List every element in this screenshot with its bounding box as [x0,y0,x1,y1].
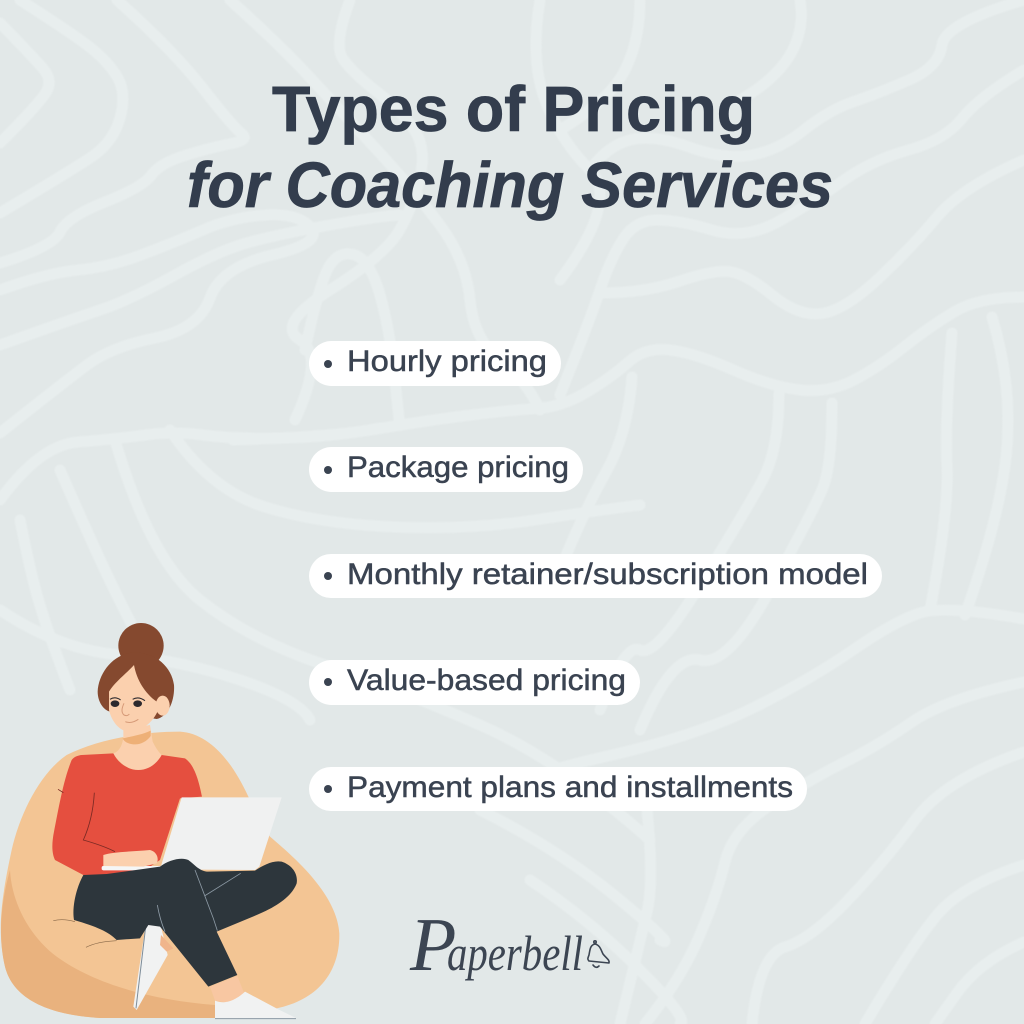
sweater [52,753,202,876]
list item: package pricing: Package pricing [347,451,569,484]
face [109,665,159,732]
neck shadow [123,731,151,744]
list item: value-based pricing: Value-based pricing [347,664,626,697]
icon: bell [588,941,609,967]
list item: monthly retainer: Monthly retainer/subscription model [347,558,868,591]
title line 2: for Coaching Services [187,149,833,221]
title line 1: Types of Pricing [272,73,755,145]
list item: payment plans: Payment plans and installments [347,771,793,804]
logo: Paperbell [409,903,609,987]
illustration: woman on beanbag with laptop [1,623,339,1019]
list item: hourly pricing: Hourly pricing [347,345,547,378]
beanbag [1,732,339,1018]
near shoe [215,992,296,1019]
legs [73,859,297,987]
list item: hourly pricing [309,341,561,386]
title [187,73,833,221]
bun and hair back [98,623,174,719]
list item: value-based pricing [309,660,640,705]
list item: package pricing [309,447,583,492]
foot [210,976,244,1003]
logo wordmark: P [409,903,456,987]
far shoe [133,925,173,1010]
eyes and smile [110,698,145,722]
hand [103,850,158,867]
laptop screen [160,797,282,870]
list item: payment plans [309,767,807,811]
ear [156,696,170,716]
neck [113,725,162,770]
list item: monthly retainer [309,554,882,598]
logo wordmark: aperbell [447,925,583,981]
laptop base [102,866,165,870]
pricing list [309,341,882,811]
